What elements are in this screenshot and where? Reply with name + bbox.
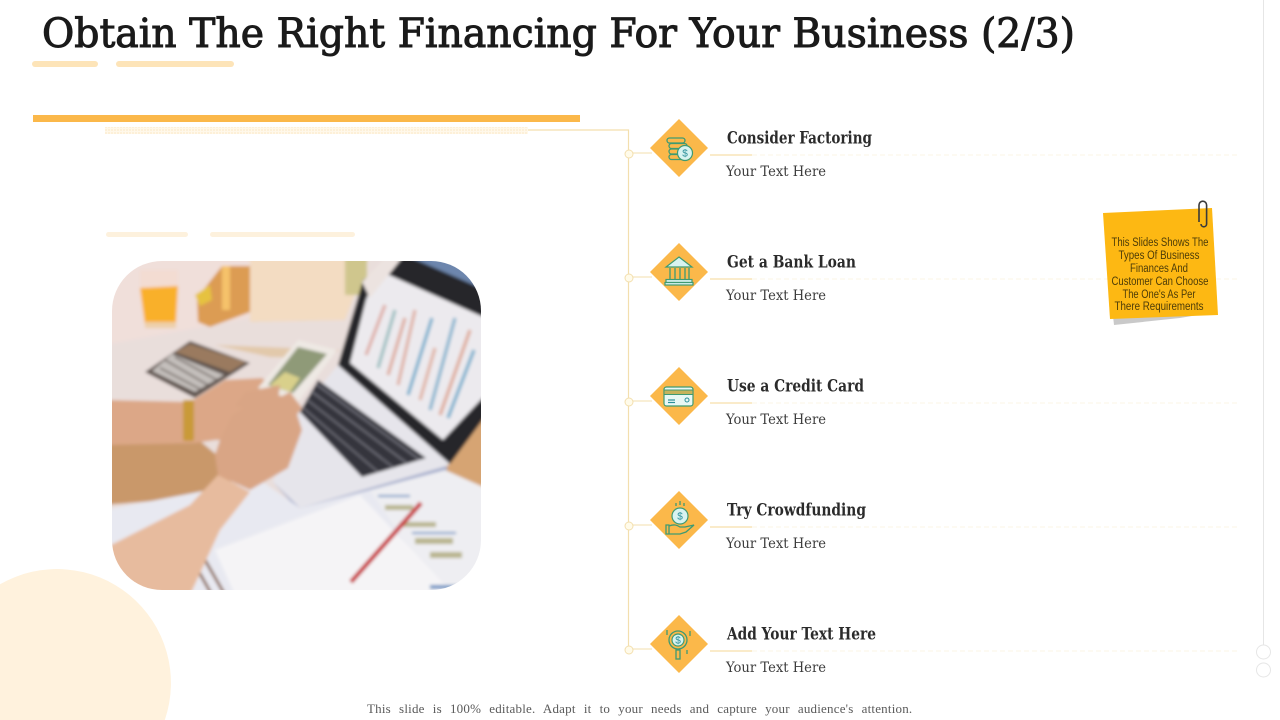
title underline accents	[32, 61, 234, 67]
forearm and hand	[105, 475, 250, 595]
text: Your Text Here	[725, 412, 826, 428]
title: Obtain The Right Financing For Your Business (2/3)	[42, 11, 1075, 57]
icon: coins: $	[682, 148, 688, 160]
note text: Finances And	[1130, 263, 1188, 275]
arm upper	[112, 376, 266, 444]
icon: hand with coin	[650, 491, 708, 549]
heading: Try Crowdfunding	[727, 500, 866, 520]
right edge rule with circles	[1256, 0, 1270, 677]
icon: bank	[650, 243, 708, 301]
orange holder	[197, 266, 250, 327]
heading: Use a Credit Card	[727, 376, 864, 396]
icon: magnifier with coin: $	[675, 636, 681, 646]
sticky note	[1103, 201, 1218, 325]
note text: This Slides Shows The	[1112, 237, 1208, 249]
item 4: crowdfunding	[625, 491, 1240, 552]
node	[625, 522, 652, 530]
text: Your Text Here	[725, 164, 826, 180]
note text: The One's As Per	[1122, 289, 1196, 301]
icon: hand with coin: $	[677, 512, 683, 522]
note text	[1112, 237, 1208, 313]
faint placeholder bars	[106, 232, 355, 237]
juice glass	[144, 282, 175, 286]
calculator	[145, 341, 250, 398]
wood under arm	[105, 441, 235, 505]
row line	[710, 278, 1240, 280]
item 5: add your text	[625, 615, 1240, 676]
text: Your Text Here	[725, 288, 826, 304]
footer note: This slide is 100% editable. Adapt it to your needs and capture your audience's attention.	[367, 701, 912, 716]
photo: hands using phone and laptop	[105, 255, 490, 595]
text: Your Text Here	[725, 660, 826, 676]
notebook papers	[112, 482, 399, 590]
row line	[710, 526, 1240, 528]
timeline connector	[528, 130, 628, 650]
keyboard	[300, 380, 426, 477]
text: Your Text Here	[725, 536, 826, 552]
node	[625, 398, 652, 406]
background circle	[0, 569, 171, 720]
icon: coins	[650, 119, 708, 177]
row line	[710, 154, 1240, 156]
note text: There Requirements	[1114, 301, 1204, 313]
main accent bar	[33, 115, 580, 122]
laptop screen lid	[338, 255, 490, 464]
heading: Add Your Text Here	[726, 624, 876, 644]
icon: credit card	[650, 367, 708, 425]
chart bars on screen	[366, 305, 474, 418]
icon: magnifier with coin	[650, 615, 708, 673]
row line	[710, 402, 1240, 404]
bracelet	[183, 400, 194, 441]
node	[625, 274, 652, 282]
note text: Types Of Business	[1118, 250, 1200, 262]
item 3: credit card	[625, 367, 1240, 428]
item 2: bank loan	[625, 243, 1240, 304]
hatched strip	[105, 127, 528, 134]
node	[625, 646, 652, 654]
red pencil	[351, 503, 421, 582]
node	[625, 150, 652, 158]
wood lower right	[445, 418, 481, 488]
heading: Get a Bank Loan	[727, 252, 856, 272]
laptop base	[273, 365, 450, 508]
heading: Consider Factoring	[727, 128, 872, 148]
phone	[258, 340, 337, 402]
item 1: consider factoring	[625, 119, 1240, 180]
row line	[710, 650, 1240, 652]
icon: paper clip	[1199, 201, 1207, 227]
note text: Customer Can Choose	[1112, 276, 1208, 288]
